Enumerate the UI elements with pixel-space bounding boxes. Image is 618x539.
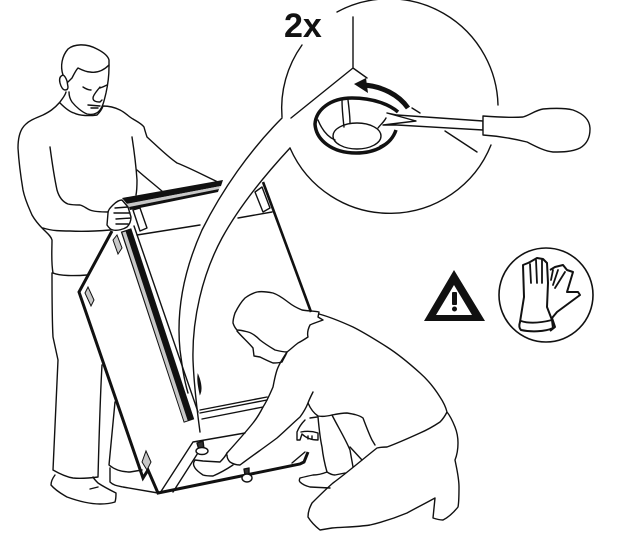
man: sweater [18,92,220,273]
man standing and holding the appliance [18,45,220,504]
woman crouching and adjusting the feet [194,292,459,530]
magnifier: funnel curves [179,118,290,432]
magnifier: adjustable foot [315,98,398,153]
woman: front arm [227,352,287,453]
cabinet: grey pads [85,235,151,470]
magnifier: circle arcs [282,0,498,213]
cabinet: side rail [124,226,198,421]
gloves: back glove [550,265,580,331]
dishwasher cabinet [79,180,311,493]
woman: hair [233,292,323,352]
gloves: front glove [519,258,553,331]
magnifier: rotation arrow [354,78,408,108]
man: trousers and shoes [51,273,158,504]
magnifier: screwdriver [383,108,590,152]
cabinet: adjustable feet [196,441,252,482]
woman: right hand with tool [297,417,318,440]
magnifier detail [179,0,590,432]
cabinet: top rail [122,180,223,210]
man: head [60,45,109,114]
cabinet: white stickers [133,187,270,231]
step count: 2x [284,7,322,45]
gloves: finger and cuff lines [521,260,565,323]
cabinet: right edge [263,182,311,312]
man: right hand on the rail [107,200,131,230]
protective gloves icon [499,248,593,342]
woman: body and front leg [308,314,459,530]
cabinet: interior lines [137,212,305,493]
woman: left hand on the foot [194,453,233,476]
cabinet: back panel outline [79,231,308,493]
magnifier: corner lines [291,17,477,152]
woman: face [237,331,287,363]
warning triangle icon [424,270,485,321]
woman: rear legs and shoe [299,403,375,488]
